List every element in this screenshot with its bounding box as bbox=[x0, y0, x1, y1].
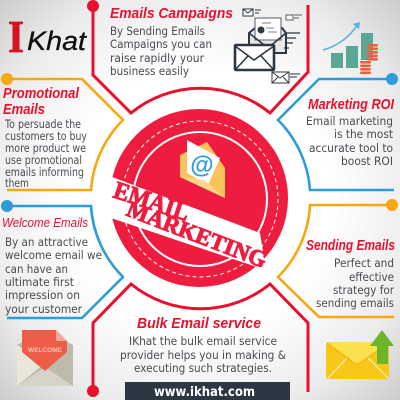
icon: envelopes bbox=[235, 9, 302, 83]
panel: emails campaigns: By Sending Emails bbox=[110, 25, 205, 38]
panel: sending emails: effective bbox=[349, 271, 394, 284]
banner text: MARKETING bbox=[123, 196, 270, 273]
panel: welcome emails: Welcome Emails bbox=[2, 215, 88, 230]
panel: promotional emails: Promotional bbox=[3, 85, 80, 102]
connector: top red bbox=[87, 0, 308, 113]
panel: welcome emails: welcome email we bbox=[5, 249, 102, 262]
connector: welcome blue bbox=[1, 200, 123, 318]
panel: bulk email service: Bulk Email service bbox=[137, 315, 261, 332]
panel: marketing ROI bbox=[306, 96, 395, 168]
website bar: www.ikhat.com bbox=[154, 385, 255, 400]
connector: bottom red bbox=[87, 284, 308, 397]
panel: sending emails: Perfect and bbox=[334, 257, 394, 270]
panel: promotional emails: To persuade the bbox=[4, 118, 81, 131]
panel: marketing ROI: accurate tool to bbox=[309, 142, 393, 155]
logo: IKhat: Khat bbox=[27, 26, 88, 56]
icon: welcome envelope: WELCOME bbox=[28, 347, 63, 354]
icon: growth chart with coins bbox=[323, 22, 378, 74]
panel: marketing ROI: Email marketing bbox=[306, 115, 393, 128]
panel: sending emails: strategy for bbox=[333, 284, 394, 297]
panel: welcome emails: ultimate first bbox=[5, 276, 75, 289]
website bar bbox=[125, 382, 290, 400]
panel: emails campaigns: Emails Campaigns bbox=[110, 5, 233, 22]
panel: welcome emails bbox=[2, 215, 102, 316]
logo: IKhat: I bbox=[8, 11, 24, 62]
icon: envelope with at sign bbox=[180, 140, 225, 198]
panel: promotional emails: emails informing bbox=[5, 166, 84, 179]
logo: IKhat bbox=[8, 11, 88, 62]
panel: welcome emails: By an attractive bbox=[5, 236, 88, 249]
panel: emails campaigns: Campaigns you can bbox=[110, 38, 212, 51]
panel: promotional emails: use promotional bbox=[5, 154, 82, 167]
connector: sending orange bbox=[278, 199, 398, 317]
panel: promotional emails: customers to buy bbox=[5, 130, 87, 143]
icon: envelope with at sign: @ bbox=[190, 152, 214, 179]
connector: promotional orange bbox=[1, 73, 123, 190]
panel: emails campaigns: business easily bbox=[110, 65, 189, 78]
panel: welcome emails: impression on bbox=[5, 289, 80, 302]
panel: marketing ROI: is the most bbox=[334, 128, 394, 141]
panel: promotional emails bbox=[3, 85, 87, 190]
panel: bulk email service: provider helps you in making & bbox=[120, 349, 286, 362]
panel: emails campaigns: raise rapidly your bbox=[110, 52, 204, 65]
panel: marketing ROI: boost ROI bbox=[341, 155, 393, 168]
panel: promotional emails: more product we bbox=[5, 142, 86, 155]
icon: yellow envelope with green arrow bbox=[326, 330, 394, 379]
icon: welcome envelope bbox=[17, 330, 73, 386]
panel: bulk email service: IKhat the bulk email service bbox=[129, 335, 277, 348]
panel: sending emails bbox=[306, 237, 395, 310]
panel: bulk email service bbox=[120, 315, 286, 375]
banner ribbon bbox=[107, 175, 270, 273]
panel: promotional emails: them bbox=[5, 177, 29, 190]
panel: promotional emails: Emails bbox=[3, 101, 45, 118]
panel: emails campaigns bbox=[110, 5, 233, 78]
panel: welcome emails: can have an bbox=[5, 263, 68, 276]
panel: bulk email service: executing such strategies. bbox=[134, 362, 272, 375]
banner text: EMAIL bbox=[110, 177, 193, 227]
connector: ROI blue bbox=[278, 73, 398, 190]
panel: welcome emails: your customer bbox=[5, 303, 82, 316]
central badge bbox=[107, 109, 288, 287]
panel: sending emails: sending emails bbox=[316, 297, 394, 310]
